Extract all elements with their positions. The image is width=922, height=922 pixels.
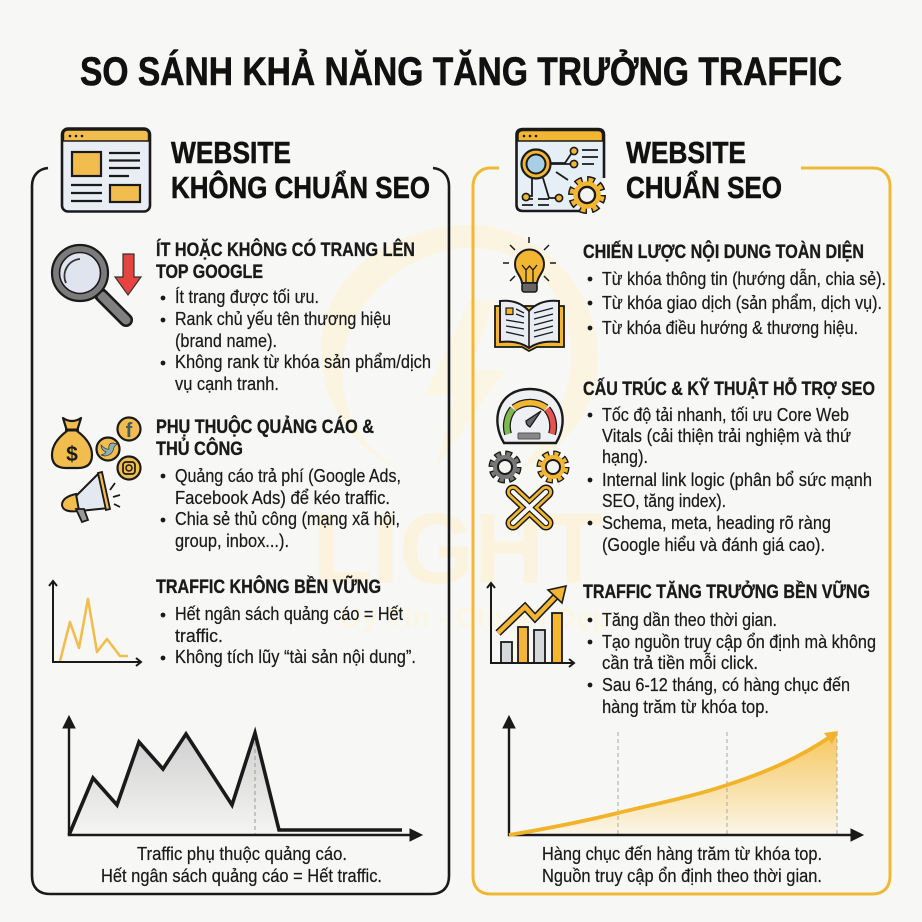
section: chiến lược nội dung toàn diện xyxy=(583,239,886,338)
section: cấu trúc và kỹ thuật hỗ trợ SEO: Vitals (cải thiện trải nghiệm và thứ xyxy=(602,425,851,446)
icon: lightbulb xyxy=(503,237,556,292)
icon: gears xyxy=(492,454,566,480)
section: traffic tăng trưởng bền vững: Sau 6-12 tháng, có hàng chục đến xyxy=(602,674,850,695)
icon: small volatile line chart xyxy=(49,581,141,666)
section: phụ thuộc quảng cáo và thủ công: Quảng cáo trả phí (Google Ads, xyxy=(175,465,401,486)
section: traffic không bền vững: traffic. xyxy=(175,625,223,646)
section: traffic tăng trưởng bền vững: Tăng dần theo thời gian. xyxy=(602,609,777,630)
section: cấu trúc và kỹ thuật hỗ trợ SEO: (Google hiểu và đánh giá cao). xyxy=(602,534,825,555)
section: ít hoặc không có trang lên top google: Rank chủ yếu tên thương hiệu xyxy=(175,308,391,329)
panel heading xyxy=(171,135,430,205)
section: phụ thuộc quảng cáo và thủ công: Facebook Ads) để kéo traffic. xyxy=(175,487,390,508)
panel heading: CHUẨN SEO xyxy=(626,170,782,205)
section: chiến lược nội dung toàn diện: Từ khóa thông tin (hướng dẫn, chia sẻ). xyxy=(602,268,886,289)
icon: crossed chain links xyxy=(513,492,546,523)
chart caption xyxy=(101,843,382,886)
icon: growth bar chart xyxy=(487,583,574,667)
section: phụ thuộc quảng cáo và thủ công: THỦ CÔNG xyxy=(156,436,243,460)
watermark: LIGHT logo: LIGHT xyxy=(313,493,603,605)
section: cấu trúc và kỹ thuật hỗ trợ SEO: Internal link logic (phân bổ sức mạnh xyxy=(602,469,872,490)
section: chiến lược nội dung toàn diện: Từ khóa điều hướng & thương hiệu. xyxy=(602,317,858,338)
section: traffic không bền vững: Hết ngân sách quảng cáo = Hết xyxy=(175,603,403,624)
section: traffic tăng trưởng bền vững xyxy=(583,579,876,717)
panel outline xyxy=(32,168,449,894)
panel heading: KHÔNG CHUẨN SEO xyxy=(171,169,430,205)
section: chiến lược nội dung toàn diện: Từ khóa giao dịch (sản phẩm, dịch vụ). xyxy=(602,292,882,313)
section: phụ thuộc quảng cáo và thủ công: PHỤ THUỘC QUẢNG CÁO & xyxy=(156,414,374,438)
icon: open book xyxy=(495,301,564,351)
section: cấu trúc và kỹ thuật hỗ trợ SEO xyxy=(583,376,875,555)
chart caption: Hết ngân sách quảng cáo = Hết traffic. xyxy=(101,865,382,886)
section: cấu trúc và kỹ thuật hỗ trợ SEO: Schema, meta, heading rõ ràng xyxy=(602,512,831,533)
watermark: LIGHT logo xyxy=(313,225,610,633)
chart: sustained traffic growth xyxy=(503,716,863,841)
panel heading: WEBSITE xyxy=(171,135,291,170)
section: ít hoặc không có trang lên top google xyxy=(156,237,431,394)
panel heading xyxy=(626,135,782,205)
section: traffic tăng trưởng bền vững: hàng trăm từ khóa top. xyxy=(602,696,769,717)
section: traffic không bền vững xyxy=(156,574,416,667)
section: cấu trúc và kỹ thuật hỗ trợ SEO: Tốc độ tải nhanh, tối ưu Core Web xyxy=(602,404,849,425)
watermark: LIGHT logo: Uy Tín - Chuẩn Đẹp xyxy=(340,602,610,633)
section: cấu trúc và kỹ thuật hỗ trợ SEO: SEO, tăng index). xyxy=(602,490,726,511)
icon: money bag, social and megaphone: f xyxy=(126,420,133,442)
section: ít hoặc không có trang lên top google: Ít trang được tối ưu. xyxy=(175,286,319,307)
icon: speedometer xyxy=(497,389,563,443)
chart caption: Nguồn truy cập ổn định theo thời gian. xyxy=(542,865,822,886)
section: chiến lược nội dung toàn diện: CHIẾN LƯỢC NỘI DUNG TOÀN DIỆN xyxy=(583,239,864,263)
icon: money bag, social and megaphone: $ xyxy=(66,443,78,466)
section: cấu trúc và kỹ thuật hỗ trợ SEO: hạng). xyxy=(602,446,648,467)
section: phụ thuộc quảng cáo và thủ công: group, inbox...). xyxy=(175,530,289,551)
icon: money bag, social and megaphone xyxy=(52,418,140,522)
icon: basic website window xyxy=(62,128,150,212)
section: traffic tăng trưởng bền vững: cần trả tiền mỗi click. xyxy=(602,652,758,673)
section: ít hoặc không có trang lên top google: vụ cạnh tranh. xyxy=(175,373,279,394)
panel: website không chuẩn SEO xyxy=(32,128,449,894)
section: traffic không bền vững: TRAFFIC KHÔNG BỀN VỮNG xyxy=(156,574,381,598)
panel heading: WEBSITE xyxy=(626,135,746,170)
section: traffic không bền vững: Không tích lũy “tài sản nội dung”. xyxy=(175,646,416,667)
section: ít hoặc không có trang lên top google: ÍT HOẶC KHÔNG CÓ TRANG LÊN xyxy=(156,237,415,261)
section: phụ thuộc quảng cáo và thủ công xyxy=(156,414,401,551)
section: ít hoặc không có trang lên top google: Không rank từ khóa sản phẩm/dịch xyxy=(175,351,431,372)
section: traffic tăng trưởng bền vững: TRAFFIC TĂNG TRƯỞNG BỀN VỮNG xyxy=(583,579,870,603)
chart: traffic dropping to zero xyxy=(63,716,422,841)
panel outline xyxy=(473,168,890,894)
section: traffic tăng trưởng bền vững: Tạo nguồn truy cập ổn định mà không xyxy=(602,631,876,652)
chart caption xyxy=(542,843,822,886)
section: ít hoặc không có trang lên top google: TOP GOOGLE xyxy=(156,261,263,283)
chart caption: Traffic phụ thuộc quảng cáo. xyxy=(137,843,347,864)
icon: SEO website with gear xyxy=(516,129,604,211)
icon: magnifier with down arrow xyxy=(52,245,141,320)
section: phụ thuộc quảng cáo và thủ công: Chia sẻ thủ công (mạng xã hội, xyxy=(175,508,400,529)
chart caption: Hàng chục đến hàng trăm từ khóa top. xyxy=(542,843,822,864)
panel: website chuẩn SEO xyxy=(473,129,890,894)
section: ít hoặc không có trang lên top google: (brand name). xyxy=(175,330,277,351)
